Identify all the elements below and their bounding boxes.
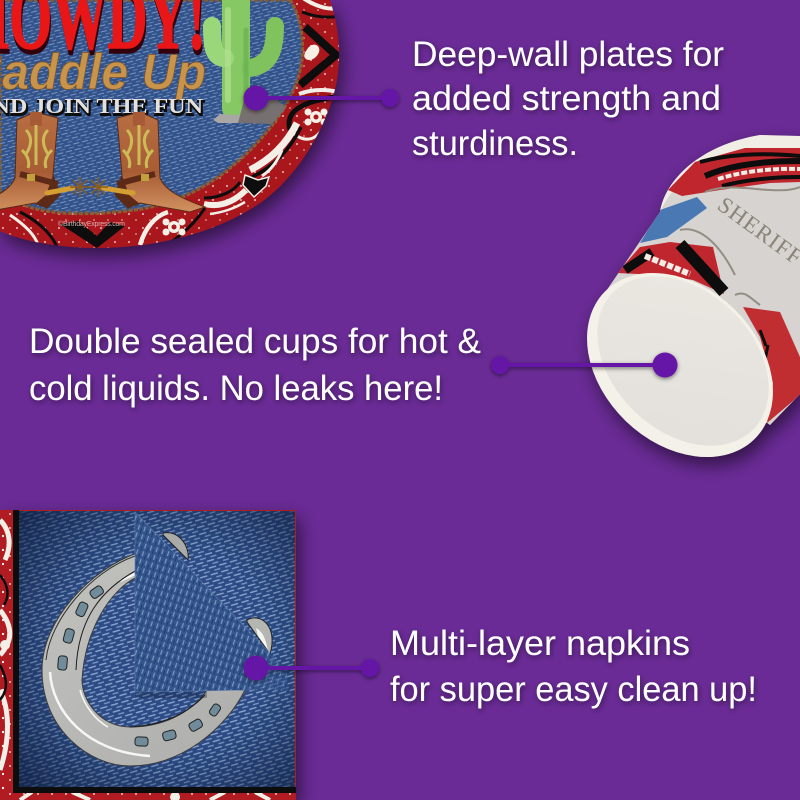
icon: horseshoe: [42, 533, 272, 766]
icon: rocks: [213, 100, 286, 124]
icon: right cowboy boot: [115, 112, 205, 212]
icon: left cowboy boot: [0, 112, 60, 212]
panel: paper plate: [0, 0, 345, 255]
napkin folded corner: [135, 512, 270, 692]
panel: napkin: [0, 510, 296, 800]
napkin fold tip: [248, 653, 288, 691]
text block: napkins: Multi-layer napkins: [390, 624, 690, 663]
text block: cups: cold liquids. No leaks here!: [29, 369, 443, 408]
text block: cups: Double sealed cups for hot &: [29, 322, 481, 361]
napkin vignette: [19, 511, 295, 787]
napkin fold shadow: [135, 692, 207, 698]
napkin bandana border: [0, 510, 296, 800]
napkin artwork: [0, 510, 296, 800]
connector: napkin: [244, 656, 379, 680]
bandana flowers: [162, 108, 328, 236]
cup base: [550, 236, 800, 494]
panel: paper cup: [580, 132, 800, 476]
napkin denim field: [19, 511, 295, 787]
plate heading: [0, 0, 207, 73]
plate denim centre: [0, 0, 302, 213]
cup body: [600, 135, 800, 425]
plate bandana rim: [0, 0, 345, 255]
text block: plates: sturdiness.: [412, 124, 578, 163]
text block: plates: added strength and: [412, 79, 721, 118]
icon: cactus: [212, 0, 275, 108]
connector: cup: [491, 352, 678, 378]
connector: plate: [244, 86, 399, 110]
plate denim shading: [0, 0, 302, 213]
text block: plates: [412, 35, 724, 163]
copyright note: ©BirthdayExpress.com: [58, 220, 125, 228]
text block: napkins: for super easy clean up!: [390, 670, 757, 709]
icon: spurs: [47, 177, 133, 197]
text block: napkins: [390, 624, 757, 709]
text block: plates: Deep-wall plates for: [412, 35, 724, 74]
text block: cups: [29, 322, 481, 408]
cup print: [617, 135, 800, 423]
